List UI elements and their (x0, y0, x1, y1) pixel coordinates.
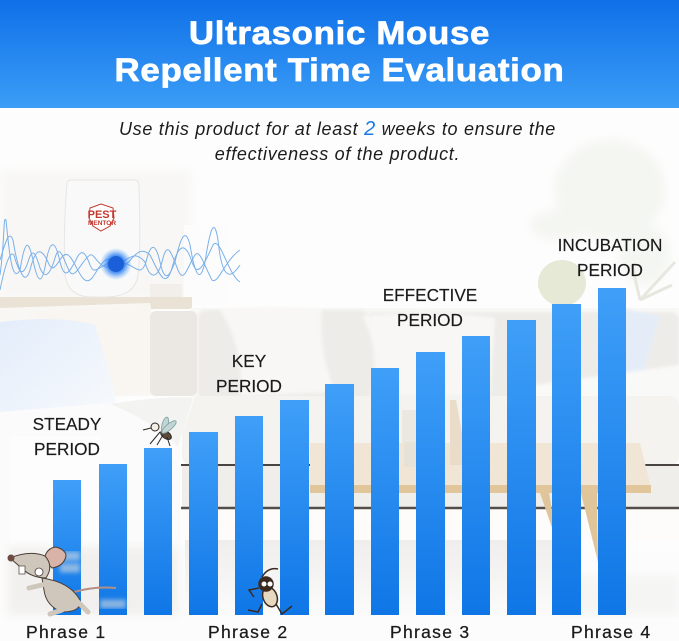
title: Repellent Time Evaluation (115, 52, 564, 88)
title: Ultrasonic Mouse (189, 15, 490, 51)
label: steady period: PERIOD (34, 439, 100, 459)
title (115, 15, 564, 88)
bar chart (53, 288, 626, 615)
label: key period: PERIOD (216, 376, 282, 396)
subtitle (119, 118, 556, 164)
icon: mosquito (143, 416, 178, 446)
product: ultrasonic repeller with waves (0, 180, 240, 297)
icon: pest mentor logo (88, 204, 117, 231)
icon: pest mentor logo: MENTOR (88, 220, 116, 227)
label: steady period (33, 414, 101, 459)
subtitle: Use this product for at least 2 weeks to ensure the (119, 118, 556, 140)
sound waves (0, 219, 240, 290)
label: incubation period: PERIOD (577, 260, 643, 280)
subtitle: effectiveness of the product. (215, 144, 460, 164)
label: incubation period (558, 235, 662, 280)
icon: pest mentor logo: PEST (88, 209, 117, 221)
label: effective period: PERIOD (397, 310, 463, 330)
label: effective period (383, 285, 477, 330)
label: steady period: STEADY (33, 414, 101, 434)
label: incubation period: INCUBATION (558, 235, 662, 255)
label: key period: KEY (232, 351, 266, 371)
label: key period (216, 351, 282, 396)
header banner (0, 0, 679, 108)
label: effective period: EFFECTIVE (383, 285, 477, 305)
icon: cockroach (248, 569, 292, 614)
icon: running mouse (8, 547, 170, 614)
